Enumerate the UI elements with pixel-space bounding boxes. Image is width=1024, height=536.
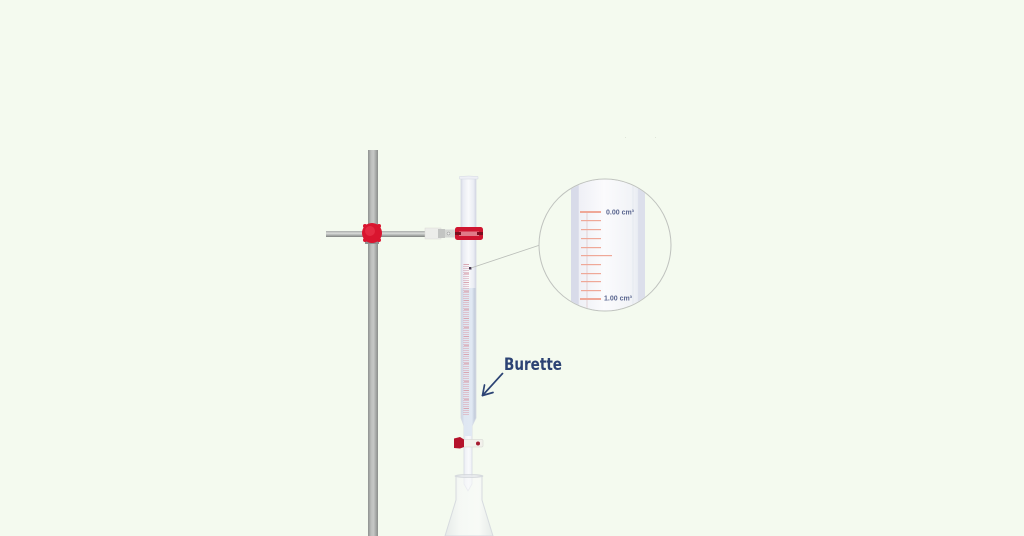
specks bbox=[625, 137, 656, 138]
burette holder clamp connector bbox=[425, 228, 455, 239]
clamp horizontal rod bbox=[326, 231, 428, 237]
stopcock white body bbox=[462, 440, 483, 447]
label: 1.00: 1.00 cm³ bbox=[604, 296, 633, 302]
red boss head clamp bbox=[362, 223, 382, 244]
stopcock red handle bbox=[454, 437, 464, 448]
conical flask bbox=[445, 474, 493, 536]
magnifier callout bbox=[539, 175, 671, 315]
leader line to magnifier bbox=[471, 245, 540, 268]
arrow: to burette bbox=[482, 374, 502, 396]
label: Burette: Burette bbox=[504, 355, 562, 375]
label: 0.00: 0.00 cm³ bbox=[606, 210, 635, 216]
burette bbox=[460, 176, 478, 491]
burette glass tube bbox=[461, 178, 476, 491]
magnified burette tube bbox=[571, 175, 645, 315]
burette graduation marks bbox=[463, 264, 470, 416]
stopcock dot bbox=[476, 442, 480, 446]
retort stand rod bbox=[368, 150, 378, 536]
burette zoom point bbox=[469, 267, 472, 270]
magnified graduation ticks bbox=[580, 211, 612, 300]
burette rim bbox=[460, 176, 478, 179]
stopcock bbox=[454, 437, 483, 448]
red burette clamp bbox=[455, 227, 483, 240]
burette liquid bbox=[462, 288, 476, 436]
